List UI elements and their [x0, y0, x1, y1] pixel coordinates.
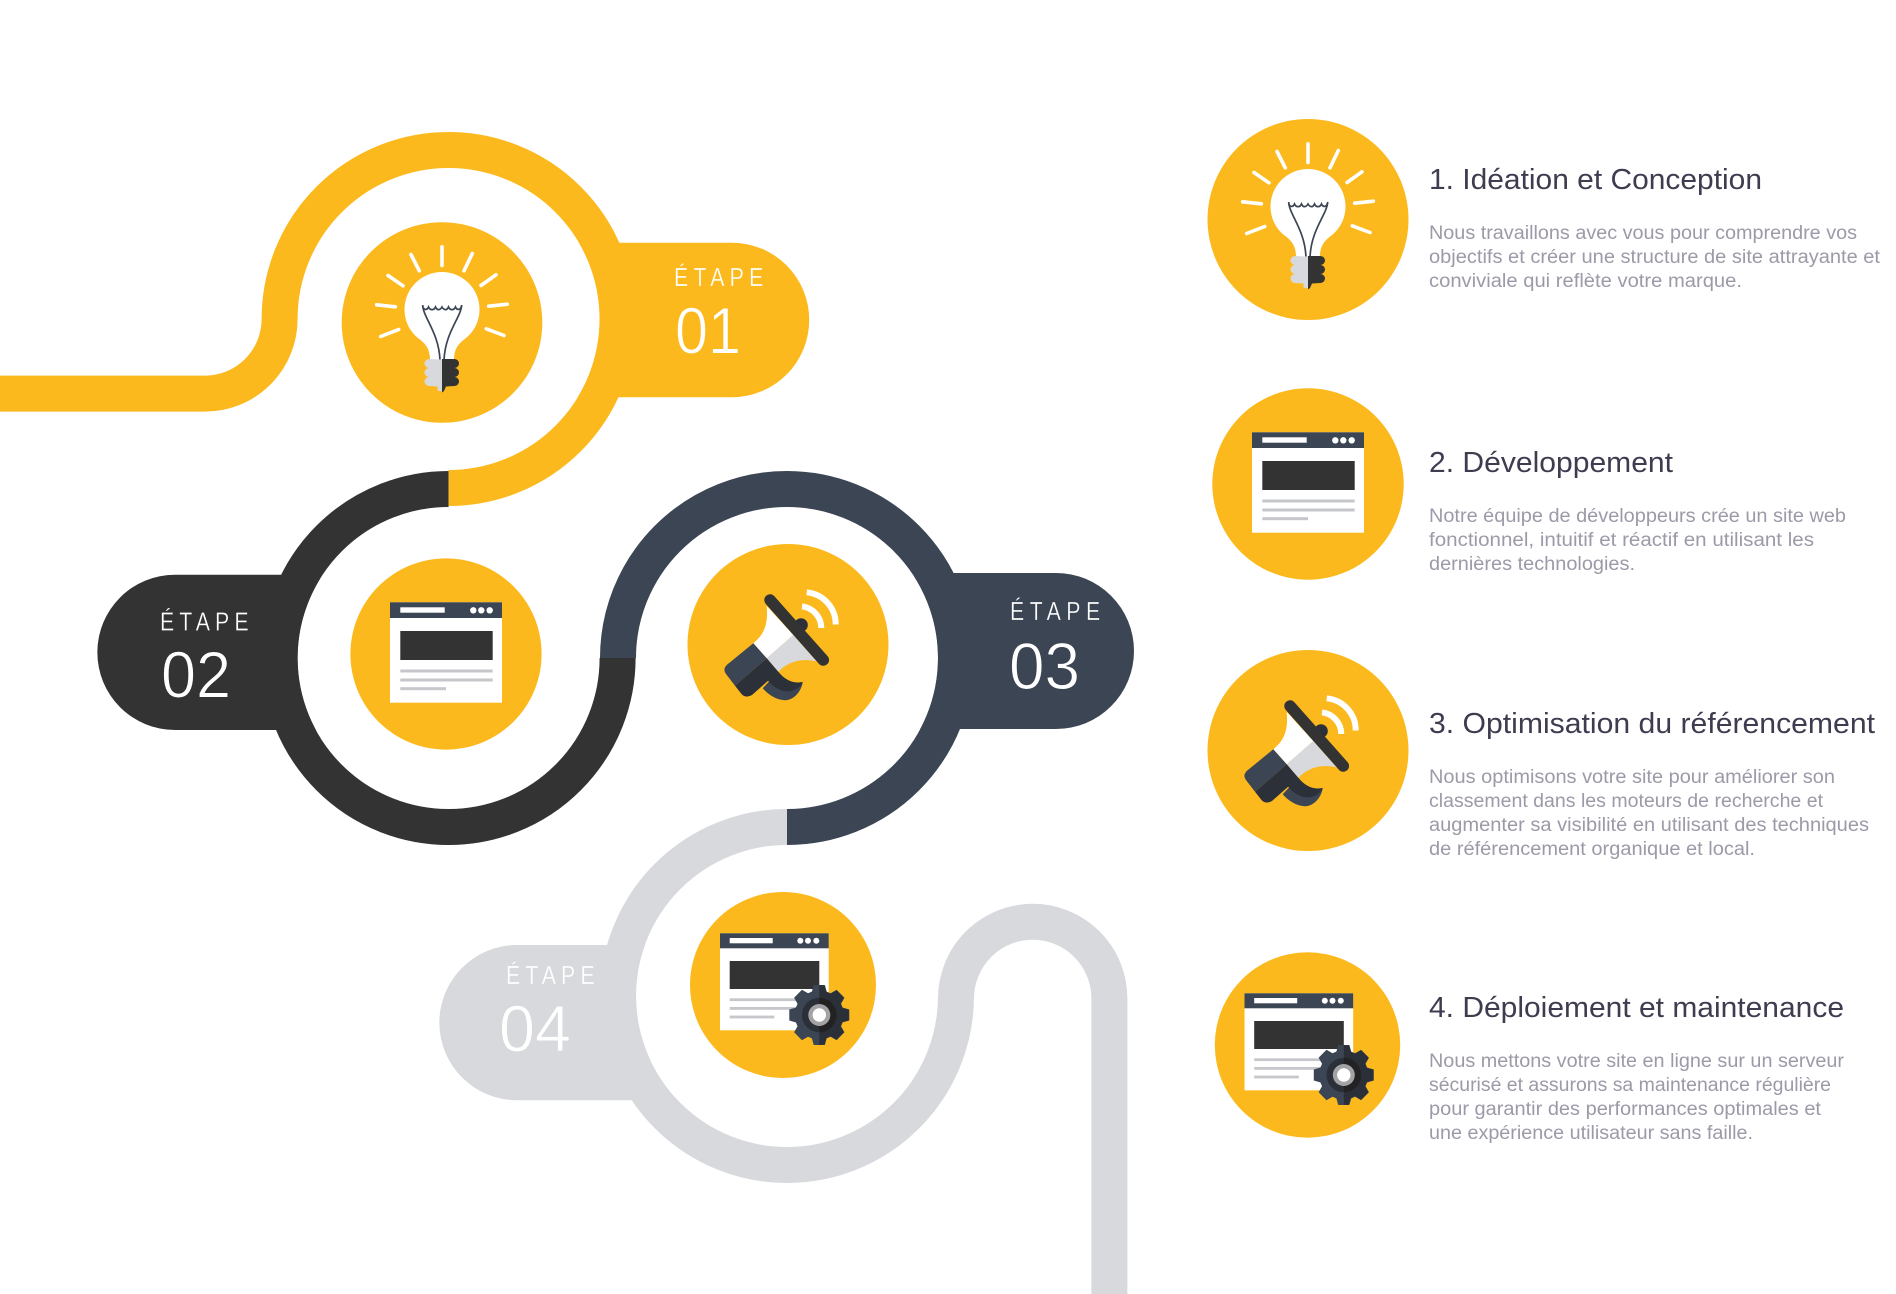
- panel: item 1: [1208, 119, 1881, 320]
- step 02 label: [160, 608, 249, 712]
- pill: étape 03: [915, 573, 1134, 729]
- step 01 label: 01: [675, 294, 741, 368]
- icon: light bulb badge, step 01: [342, 222, 542, 423]
- text block: item 1: objectifs et créer une structure de site attrayante et: [1429, 247, 1881, 268]
- panel: item 2: [1212, 388, 1846, 580]
- text block: item 2: [1429, 506, 1846, 575]
- text block: item 4: sécurisé et assurons sa maintenance régulière: [1429, 1075, 1831, 1096]
- icon: megaphone badge, step 03: [688, 544, 888, 745]
- text block: item 3: [1429, 767, 1869, 860]
- text block: item 3: classement dans les moteurs de recherche et: [1429, 791, 1824, 812]
- step 01 label: ÉTAPE: [674, 263, 763, 293]
- text block: item 4: [1429, 1051, 1845, 1144]
- step 04 label: 04: [499, 992, 571, 1066]
- text block: item 4: pour garantir des performances optimales et: [1429, 1099, 1822, 1120]
- path: navy segment: [618, 489, 956, 827]
- text block: item 3: Nous optimisons votre site pour améliorer son: [1429, 767, 1835, 788]
- heading: item 3: 3. Optimisation du référencement: [1429, 708, 1875, 740]
- step 04 label: ÉTAPE: [506, 961, 595, 991]
- step 03 label: ÉTAPE: [1010, 597, 1100, 627]
- icon: light bulb badge: [1208, 119, 1408, 320]
- text block: item 4: une expérience utilisateur sans faille.: [1429, 1123, 1753, 1144]
- icon: megaphone badge: [1208, 650, 1408, 851]
- icon: browser badge: [1212, 388, 1404, 580]
- heading: item 4: 4. Déploiement et maintenance: [1429, 992, 1844, 1024]
- panel: item 3: [1208, 650, 1875, 860]
- heading: item 1: 1. Idéation et Conception: [1429, 164, 1762, 196]
- panel: item 4: [1215, 952, 1845, 1144]
- text block: item 1: Nous travaillons avec vous pour comprendre vos: [1429, 223, 1857, 244]
- text block: item 3: de référencement organique et local.: [1429, 839, 1755, 860]
- step 02 label: 02: [161, 638, 231, 712]
- path: yellow segment: [0, 150, 618, 488]
- icon: browser with gear badge, step 04: [690, 892, 876, 1078]
- heading: item 2: 2. Développement: [1429, 447, 1673, 479]
- step 02 label: ÉTAPE: [160, 608, 249, 637]
- text block: item 2: dernières technologies.: [1429, 554, 1635, 575]
- pill: étape 01: [560, 243, 809, 397]
- text block: item 3: augmenter sa visibilité en utilisant des techniques: [1429, 815, 1869, 836]
- text block: item 2: Notre équipe de développeurs crée un site web: [1429, 506, 1846, 527]
- path: dark segment: [280, 489, 618, 827]
- pill: étape 02: [97, 575, 320, 730]
- step 04 label: [499, 961, 595, 1066]
- step 01 label: [674, 263, 763, 368]
- icon: browser badge, step 02: [350, 558, 542, 750]
- text block: item 1: conviviale qui reflète votre marque.: [1429, 271, 1742, 292]
- step 03 label: 03: [1009, 629, 1080, 703]
- text block: item 1: [1429, 223, 1881, 292]
- inner white discs of the rings: [298, 168, 938, 1147]
- path: grey segment: [618, 827, 1109, 1294]
- text block: item 4: Nous mettons votre site en ligne sur un serveur: [1429, 1051, 1845, 1072]
- icon: browser with gear badge: [1215, 952, 1400, 1138]
- pill: étape 04: [439, 945, 650, 1100]
- step 03 label: [1009, 597, 1100, 703]
- text block: item 2: fonctionnel, intuitif et réactif en utilisant les: [1429, 530, 1814, 551]
